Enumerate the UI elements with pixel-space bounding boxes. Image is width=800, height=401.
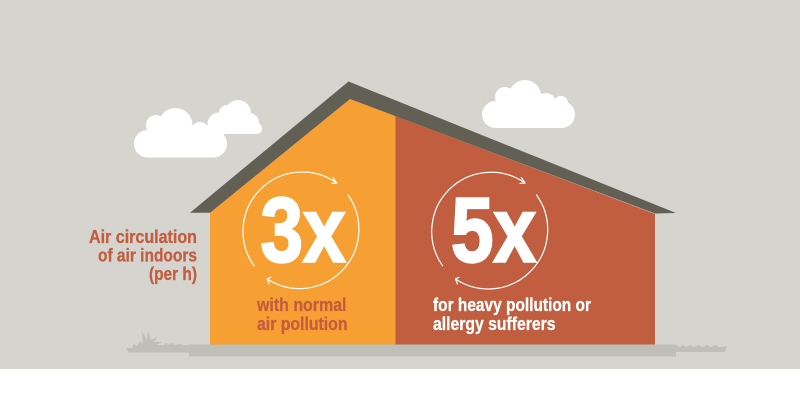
cloud: front left — [134, 108, 227, 158]
foundation slab — [189, 344, 676, 356]
side label: (per h) — [149, 264, 197, 284]
red caption: for heavy pollution or — [433, 295, 591, 315]
grass: left — [126, 330, 190, 352]
orange caption — [256, 295, 348, 334]
orange caption: air pollution — [257, 314, 348, 334]
wall: red — [396, 116, 655, 344]
orange caption: with normal — [256, 295, 346, 315]
grass: right — [676, 345, 727, 352]
cloud: right — [482, 80, 575, 128]
side label — [89, 227, 197, 284]
big number: 3x: 3x — [260, 180, 346, 282]
circular arrows: 5x — [432, 172, 548, 289]
red caption: allergy sufferers — [433, 314, 556, 334]
side label: of air indoors — [98, 246, 197, 266]
roof — [190, 82, 676, 214]
circular arrows: 3x — [243, 172, 359, 289]
red caption — [433, 295, 591, 334]
cloud: back left — [208, 100, 262, 136]
wall: orange — [210, 99, 396, 344]
side label: Air circulation — [89, 227, 197, 247]
big number: 5x: 5x — [451, 180, 536, 282]
